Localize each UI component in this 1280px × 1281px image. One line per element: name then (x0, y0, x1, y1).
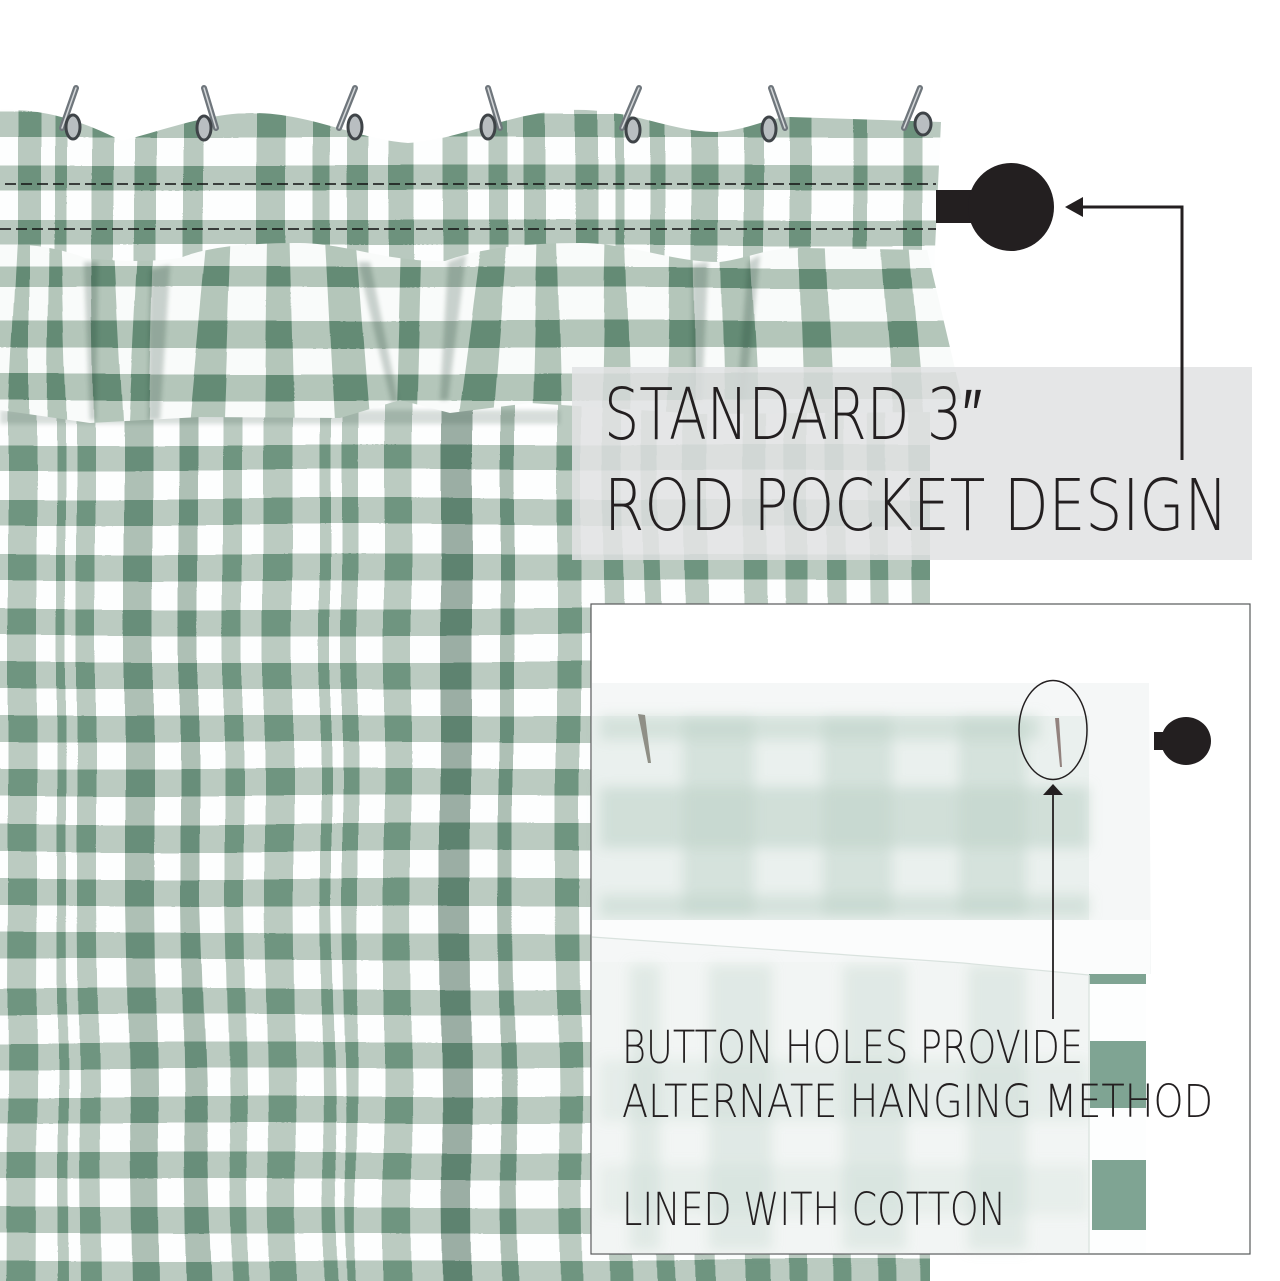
panel: button holes and lining inset (591, 604, 1250, 1254)
text: button holes: BUTTON HOLES PROVIDE (622, 1021, 1083, 1074)
callout ellipse around button hole (1019, 680, 1087, 780)
rod pocket header band (0, 110, 941, 262)
icon: small rod finial (1154, 717, 1211, 765)
curtain body: gingham check (0, 380, 980, 1281)
dashed stitching line: upper (5, 183, 936, 185)
button hole: left (638, 714, 651, 763)
arrow: points to button hole (1043, 784, 1063, 1019)
callout: standard rod pocket: STANDARD 3″ (604, 373, 982, 456)
text: lined with cotton: LINED WITH COTTON (622, 1183, 1006, 1236)
dashed stitching line: lower (0, 228, 936, 230)
lining fabric with ghosted check (592, 683, 1151, 1253)
icon: curtain rod with round finial (936, 163, 1054, 251)
callout: standard rod pocket (572, 367, 1252, 560)
ruffle shadow on curtain body (0, 410, 560, 424)
button hole: right (1055, 718, 1062, 767)
arrow: points to rod finial (1065, 197, 1182, 460)
ruffle (0, 243, 962, 423)
icon: curtain ring clips (62, 88, 931, 142)
